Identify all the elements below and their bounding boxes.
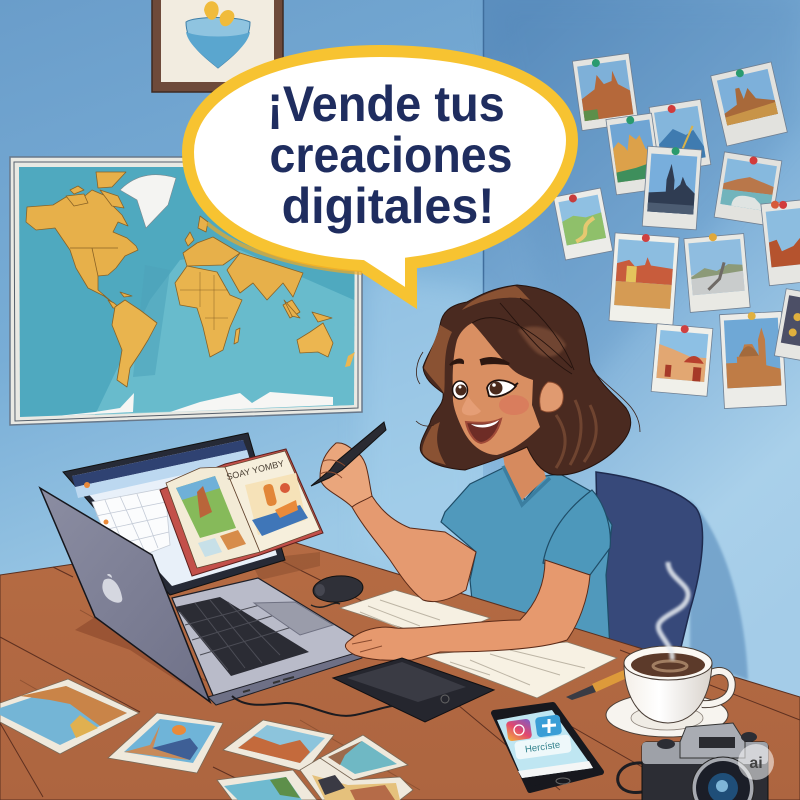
land: North America: [26, 172, 138, 308]
photo: blue mountain: [649, 99, 711, 173]
photo: red tower: [761, 196, 800, 286]
coffee: [631, 653, 705, 677]
face: [453, 323, 540, 455]
paper: notes behind arm: [340, 590, 490, 640]
land: Antarctica: [57, 392, 333, 416]
wall: right section: [483, 0, 800, 720]
desk photos: [0, 679, 413, 800]
stylus: [311, 422, 386, 486]
photo: colourful towers: [606, 113, 662, 195]
drawing tablet: [333, 658, 494, 722]
eyebrow: left: [450, 359, 463, 365]
ear: [540, 382, 563, 412]
smartphone: [494, 705, 601, 790]
land: Eurasia: [183, 216, 332, 322]
arm: raised: [352, 496, 476, 602]
eyebrow: right: [481, 358, 509, 364]
book page title: SOAY YOMBY: [225, 458, 285, 482]
camera body: [642, 742, 768, 800]
monitor with calendar: [63, 433, 285, 595]
photo: dark cathedral: [642, 145, 702, 230]
cheek blush: [499, 395, 529, 415]
land: South America: [112, 300, 157, 387]
photo: riverside: [714, 152, 782, 226]
hand: [320, 443, 372, 507]
laptop: [40, 488, 362, 705]
woman: raised arm with stylus: [311, 422, 476, 602]
trackpad: [254, 602, 333, 635]
right page: [225, 451, 320, 552]
photo: waterfront town: [609, 232, 679, 325]
photo: canal city: [711, 62, 787, 146]
photo: market: [300, 758, 413, 800]
camera lens: [692, 757, 754, 800]
steam: [658, 562, 688, 660]
cup handle: [702, 671, 732, 704]
eye: left: [452, 381, 468, 399]
cup body: [624, 663, 712, 723]
photo: lake: [217, 770, 317, 800]
stray hair strands: [416, 352, 640, 432]
phone label: Hercíste: [524, 740, 561, 755]
laptop base: [172, 578, 362, 700]
land: Africa: [175, 266, 242, 357]
land: Greenland: [120, 175, 176, 228]
tablet cable: [232, 696, 392, 716]
pencil: [566, 670, 627, 700]
papers: [340, 590, 617, 698]
photo: harbour: [320, 735, 408, 780]
framed picture: [152, 0, 283, 92]
photo: skyline: [108, 713, 223, 773]
world map poster: [10, 157, 362, 425]
book: [160, 449, 323, 576]
icon: apple logo: [102, 574, 122, 603]
photo: castle hill: [572, 53, 639, 131]
woman: arm on desk: [345, 560, 590, 660]
icon: plus: [535, 714, 562, 738]
photo: canyon: [223, 720, 334, 772]
bubble text: digitales!: [282, 178, 494, 234]
hair: highlights: [518, 326, 566, 357]
nose: [462, 396, 481, 415]
wall: left section: [0, 0, 484, 600]
sleeve: right: [543, 490, 610, 575]
left page: [166, 467, 260, 568]
bubble text: ¡Vende tus: [267, 77, 505, 132]
icon: picture drop: [186, 1, 250, 68]
photo: skater: [684, 231, 750, 312]
woman: head: [416, 285, 640, 475]
bubble text: [267, 77, 512, 234]
saucer: [606, 693, 728, 737]
office chair: [596, 472, 703, 668]
paper: notes in front: [422, 642, 617, 698]
photo: cropped right edge: [774, 289, 800, 364]
computer mouse: [311, 574, 364, 607]
photo: winding path: [553, 188, 613, 260]
photo: domed church: [720, 310, 786, 409]
photo: coast: [0, 679, 139, 754]
photo: orange dome: [651, 323, 713, 396]
keyboard: [175, 597, 309, 676]
camera strap: [618, 763, 642, 793]
eye: right: [487, 380, 518, 397]
watermark: ai badge: [738, 744, 774, 780]
polaroid photos on the wall: [553, 53, 800, 409]
camera: [618, 723, 768, 800]
hair: strands: [472, 298, 574, 374]
watermark: ai badge: ai: [749, 755, 763, 772]
coffee cup: [606, 562, 732, 737]
hair: back: [420, 285, 631, 475]
desk: [0, 535, 800, 800]
mouth: [466, 419, 501, 443]
bubble text: creaciones: [270, 127, 512, 183]
woman: torso and shirt: [441, 440, 612, 650]
icon: instagram style: [506, 718, 532, 742]
neck: [503, 440, 546, 500]
speech bubble: [188, 51, 572, 298]
land: Australia: [297, 323, 333, 357]
laptop lid: [40, 488, 210, 702]
